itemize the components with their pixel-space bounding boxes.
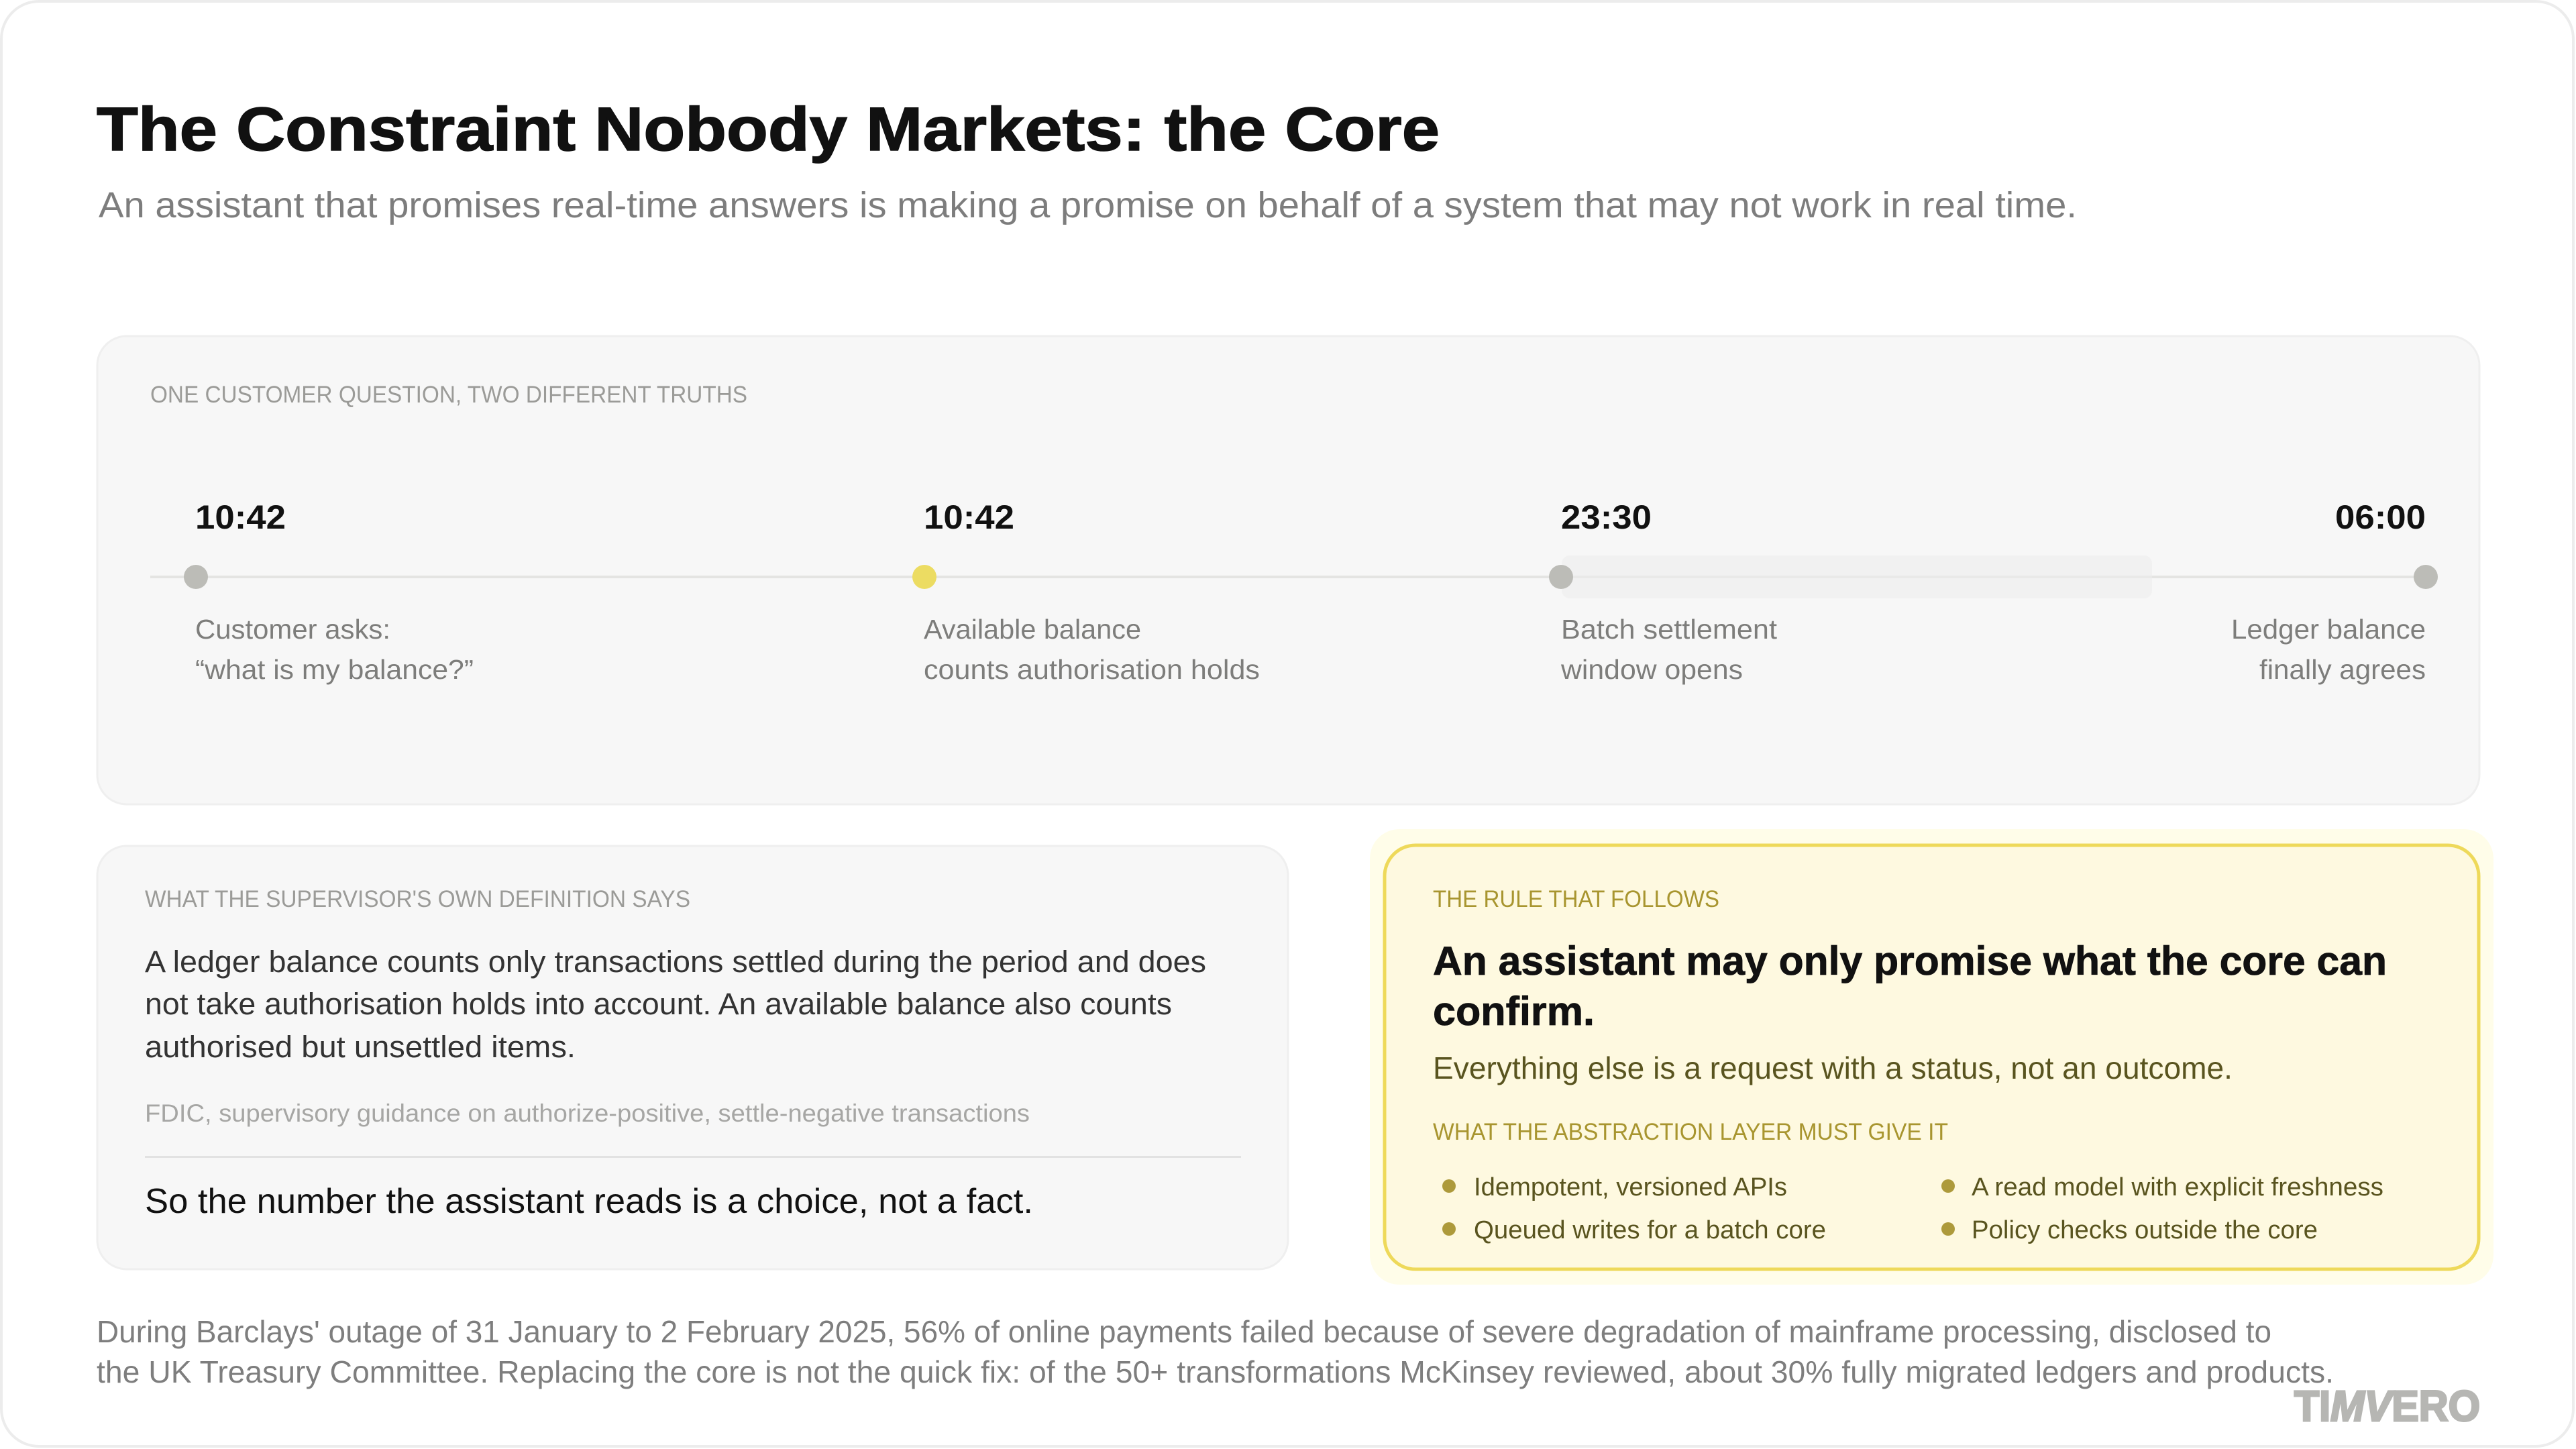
rule heading: THE RULE THAT FOLLOWS bbox=[1433, 886, 1719, 912]
event: available balance: 10:42 bbox=[924, 498, 1014, 536]
logo: Timvero wordmark: TIMVERO bbox=[2294, 1382, 2480, 1430]
event: customer asks: “what is my balance?” bbox=[195, 654, 474, 685]
panel: timeline bbox=[97, 336, 2479, 804]
event: batch settlement: Batch settlement bbox=[1561, 614, 1778, 645]
event: customer asks: Customer asks: bbox=[195, 614, 390, 645]
list item: policy checks: Policy checks outside the core bbox=[1972, 1216, 2318, 1244]
list item: queued writes: Queued writes for a batch core bbox=[1474, 1216, 1826, 1244]
subtitle: An assistant that promises real-time answers is making a promise on behalf of a system that may not work in real time. bbox=[99, 185, 2077, 225]
event: batch settlement: 23:30 bbox=[1561, 498, 1652, 536]
rule statement: confirm. bbox=[1433, 989, 1595, 1034]
conclusion: So the number the assistant reads is a choice, not a fact. bbox=[145, 1182, 1033, 1221]
footnote: the UK Treasury Committee. Replacing the core is not the quick fix: of the 50+ transformations McKinsey reviewed, about 30% fully migrated ledgers and products. bbox=[97, 1354, 2334, 1389]
event: batch settlement bbox=[1549, 498, 1778, 685]
event: ledger balance: 06:00 bbox=[2335, 498, 2426, 536]
event: customer asks: 10:42 bbox=[195, 498, 286, 536]
definition body: not take authorisation holds into account. An available balance also counts bbox=[145, 987, 1172, 1021]
definition body: authorised but unsettled items. bbox=[145, 1030, 576, 1064]
timeline axis line bbox=[150, 576, 2426, 578]
event: available balance bbox=[912, 498, 1260, 685]
panel: the rule bbox=[1370, 829, 2493, 1285]
list item: idempotent APIs: Idempotent, versioned APIs bbox=[1474, 1173, 1787, 1201]
abstraction layer heading: WHAT THE ABSTRACTION LAYER MUST GIVE IT bbox=[1433, 1119, 1948, 1145]
event: available balance: counts authorisation holds bbox=[924, 654, 1260, 685]
event: customer asks bbox=[184, 498, 474, 685]
panel: supervisor definition bbox=[97, 846, 1288, 1269]
definition body bbox=[145, 945, 1206, 1064]
event: ledger balance: Ledger balance bbox=[2231, 614, 2426, 645]
rule statement: An assistant may only promise what the core can bbox=[1433, 938, 2387, 983]
event: ledger balance: finally agrees bbox=[2259, 654, 2426, 685]
event: ledger balance bbox=[2231, 498, 2438, 685]
settlement window band bbox=[1562, 555, 2152, 598]
rule statement bbox=[1433, 938, 2387, 1034]
footnote: During Barclays' outage of 31 January to 2 February 2025, 56% of online payments failed because of severe degradation of mainframe processing, disclosed to bbox=[97, 1314, 2271, 1349]
list item: read model: A read model with explicit freshness bbox=[1972, 1173, 2383, 1201]
event: available balance: Available balance bbox=[924, 614, 1141, 645]
event: batch settlement: window opens bbox=[1560, 654, 1743, 685]
footnote bbox=[97, 1314, 2334, 1389]
timeline heading: ONE CUSTOMER QUESTION, TWO DIFFERENT TRUTHS bbox=[150, 382, 747, 408]
definition heading: WHAT THE SUPERVISOR'S OWN DEFINITION SAYS bbox=[145, 886, 690, 912]
source citation: FDIC, supervisory guidance on authorize-positive, settle-negative transactions bbox=[145, 1099, 1030, 1127]
definition body: A ledger balance counts only transactions settled during the period and does bbox=[145, 945, 1206, 979]
rule subtext: Everything else is a request with a status, not an outcome. bbox=[1433, 1051, 2233, 1085]
title: The Constraint Nobody Markets: the Core bbox=[97, 95, 1440, 164]
